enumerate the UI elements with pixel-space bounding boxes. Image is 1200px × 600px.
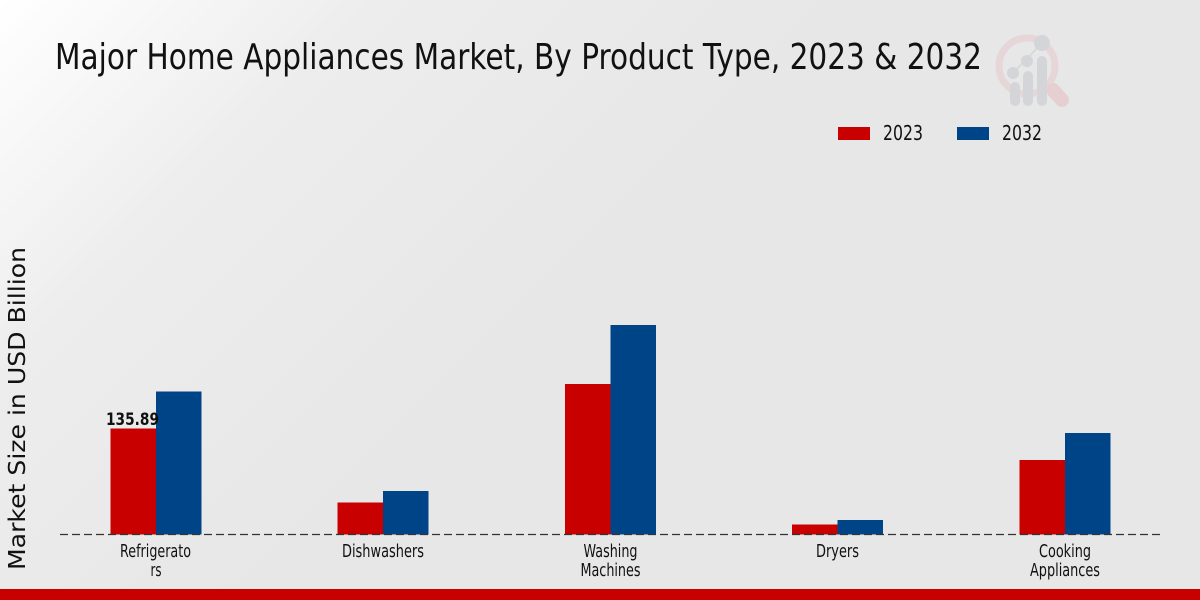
tick label: Cooking Appliances: Cooking <box>1039 542 1091 562</box>
legend <box>838 121 1042 145</box>
data label: 135.89: 135.89 <box>106 410 159 429</box>
bars: Cooking Appliances <box>1020 433 1110 534</box>
tick label: Washing Machines: Washing <box>584 542 638 562</box>
y-axis label: Market Size in USD Billion <box>5 247 31 570</box>
bars: Dishwashers <box>338 491 428 534</box>
tick label: Dryers: Dryers <box>816 542 859 562</box>
title: Major Home Appliances Market, By Product Type, 2023 & 2032 <box>55 37 982 78</box>
tick label: Refrigerators <box>120 542 191 581</box>
tick label: Dishwashers: Dishwashers <box>342 542 424 562</box>
tick label: Cooking Appliances <box>1030 542 1100 581</box>
tick label: Refrigerators: Refrigerato <box>120 542 191 562</box>
tick label: Washing Machines: Machines <box>580 561 640 581</box>
bar chart <box>60 325 1160 581</box>
icon: magnifier logo watermark <box>999 35 1062 106</box>
legend item: 2023 <box>838 121 923 145</box>
tick label: Washing Machines <box>580 542 640 581</box>
bars: Refrigerators <box>110 392 202 534</box>
legend item: 2032: 2032 <box>1002 121 1042 145</box>
x tick labels <box>120 542 1100 581</box>
bars: Dryers <box>792 520 883 534</box>
footer bar <box>0 589 1200 600</box>
bars: Washing Machines <box>565 325 656 534</box>
tick label: Cooking Appliances: Appliances <box>1030 561 1100 581</box>
tick label: Refrigerators: rs <box>150 561 162 581</box>
legend item: 2023: 2023 <box>883 121 923 145</box>
legend item: 2032 <box>957 121 1042 145</box>
baseline <box>60 534 1160 536</box>
